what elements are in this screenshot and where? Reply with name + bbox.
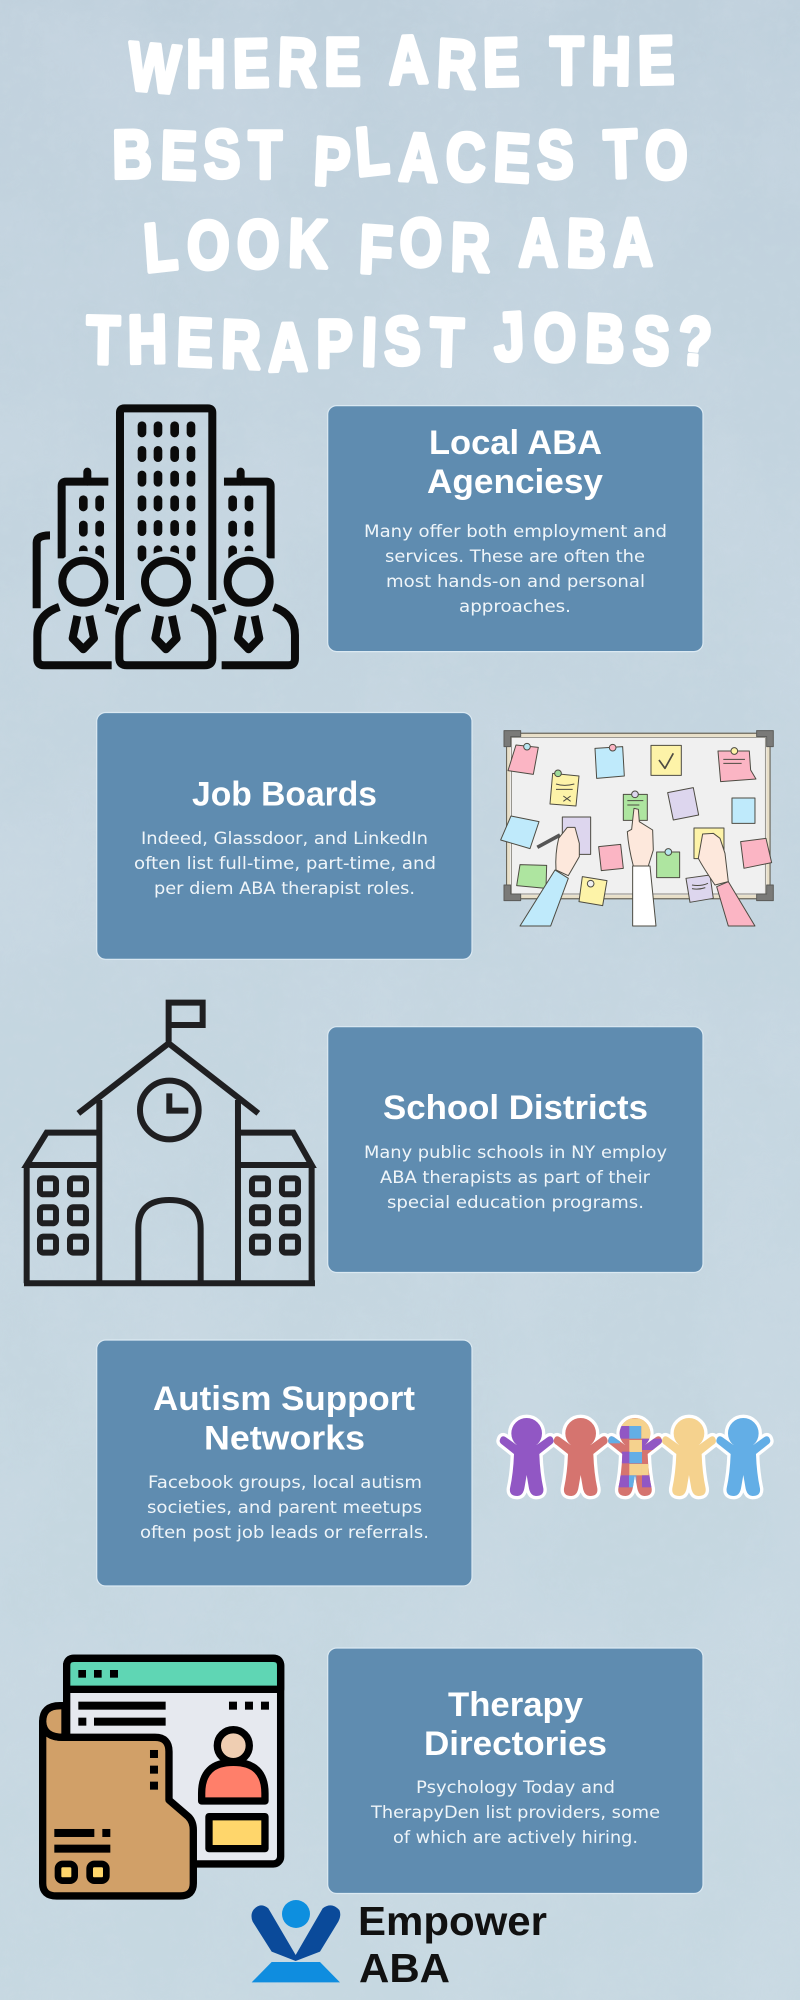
description: services. These are often the [385,547,645,566]
heading: Autism Support [153,1380,415,1418]
heading [427,424,603,501]
title: BEST PLACES TO [112,112,688,202]
description: Indeed, Glassdoor, and LinkedIn [141,829,428,848]
icon: row of paper-doll people [500,1418,770,1496]
description [140,1473,429,1542]
description: ABA therapists as part of their [380,1168,650,1187]
heading: Agenciesy [427,463,603,501]
heading: School Districts [383,1089,648,1127]
logo mark [251,1900,340,1982]
description: per diem ABA therapist roles. [154,879,415,898]
title: WHERE ARE THE [126,22,675,109]
panel: school districts [328,1027,703,1272]
description: special education programs. [387,1193,644,1212]
description: often post job leads or referrals. [140,1523,429,1542]
card background [328,406,703,652]
description: Many offer both employment and [364,522,667,541]
heading: Job Boards [192,776,377,814]
heading [153,1380,415,1458]
panel: local ABA agencies [328,406,703,652]
description [370,1778,660,1847]
description: societies, and parent meetups [147,1498,422,1517]
card background [97,1340,472,1586]
logo wordmark [358,1898,547,1991]
heading: Networks [204,1420,365,1458]
icon: office towers with business people [37,408,295,665]
description: Psychology Today and [416,1778,615,1797]
icon: school building [24,1003,315,1283]
description [364,522,667,616]
description: approaches. [459,597,571,616]
panel: therapy directories [328,1648,703,1894]
description: TherapyDen list providers, some [370,1803,660,1822]
heading: Directories [424,1725,607,1763]
panel: autism support networks [97,1340,472,1586]
card background [328,1027,703,1272]
card background [328,1648,703,1894]
logo: Empower ABA [251,1898,547,1991]
description: often list full-time, part-time, and [134,854,436,873]
description: most hands-on and personal [386,572,645,591]
description: of which are actively hiring. [393,1828,638,1847]
heading: Therapy [448,1686,583,1724]
icon: folder with profile window [43,1658,281,1896]
description [364,1143,667,1212]
description: Facebook groups, local autism [148,1473,422,1492]
card background [97,712,472,959]
heading [424,1686,607,1763]
description [134,829,436,898]
description: Many public schools in NY employ [364,1143,667,1162]
icon: whiteboard with sticky notes and hands [501,731,773,926]
heading: Local ABA [429,424,602,462]
panel: job boards [97,712,472,959]
logo wordmark: Empower [358,1898,547,1944]
title: THERAPIST JOBS? [86,298,714,386]
title [86,22,714,386]
logo wordmark: ABA [359,1945,450,1991]
title: LOOK FOR ABA [141,204,653,290]
